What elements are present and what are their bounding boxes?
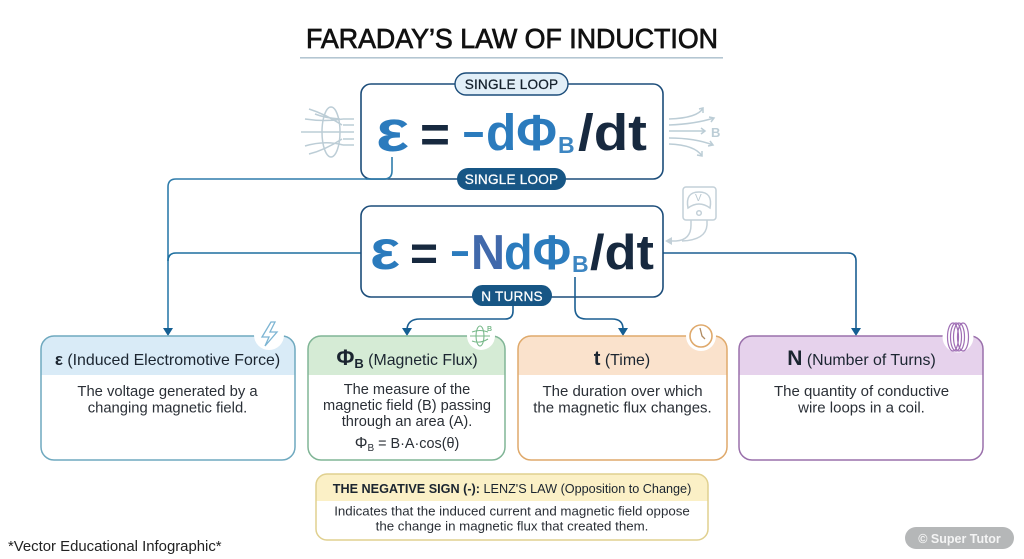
formula: single loop: dΦ bbox=[486, 104, 557, 161]
text: flux description: through an area (A). bbox=[342, 414, 472, 430]
label: single loop top: SINGLE LOOP bbox=[465, 77, 558, 92]
heading: turns: N (Number of Turns) bbox=[787, 347, 936, 370]
text: time description: The duration over which bbox=[542, 383, 703, 400]
formula: N turns: ε bbox=[370, 218, 400, 281]
formula: single loop: – bbox=[463, 102, 484, 159]
panel: magnetic flux card bbox=[308, 322, 505, 460]
icon: flux loop: B bbox=[487, 326, 492, 333]
connector: right to turns card bbox=[663, 253, 861, 336]
connector: flux to time card bbox=[575, 277, 628, 336]
text: Lenz description: Indicates that the induced current and magnetic field oppose bbox=[334, 504, 690, 518]
heading: EMF: ε (Induced Electromotive Force) bbox=[55, 350, 280, 369]
text: EMF description: changing magnetic field. bbox=[88, 400, 247, 416]
label: N turns: N TURNS bbox=[481, 289, 543, 304]
watermark: © Super Tutor bbox=[918, 532, 1001, 546]
text: turns description: The quantity of conductive bbox=[774, 383, 949, 400]
heading: Lenz: THE NEGATIVE SIGN (-): LENZ'S LAW (Opposition to Change) bbox=[333, 482, 691, 496]
formula: N turns bbox=[370, 218, 654, 281]
icon: diverging field lines B: B bbox=[711, 125, 720, 140]
caption: *Vector Educational Infographic* bbox=[8, 539, 222, 555]
text: turns description: wire loops in a coil. bbox=[797, 400, 925, 416]
watermark bbox=[905, 527, 1014, 549]
panel: single loop formula bbox=[361, 73, 663, 190]
formula: N turns: B bbox=[572, 251, 589, 277]
connector: N turns to flux card bbox=[402, 305, 513, 336]
label: single loop bottom bbox=[457, 168, 566, 190]
label: single loop bottom: SINGLE LOOP bbox=[465, 172, 558, 187]
panel: time card bbox=[518, 321, 727, 460]
heading: flux: (Magnetic Flux) bbox=[364, 352, 478, 369]
icon: clock bbox=[686, 321, 716, 351]
formula: N turns: /dt bbox=[590, 226, 654, 280]
label: N turns bbox=[472, 285, 552, 306]
panel: Lenz's law callout bbox=[316, 474, 708, 540]
formula: N turns: = bbox=[410, 227, 438, 281]
icon: voltmeter bbox=[665, 187, 716, 245]
text: flux description: magnetic field (B) passing bbox=[323, 398, 491, 414]
formula: single loop: B bbox=[558, 132, 575, 158]
formula: N turns: – bbox=[451, 224, 469, 278]
icon: diverging field lines B bbox=[669, 108, 720, 156]
icon: magnetic field through loop bbox=[301, 107, 354, 157]
icon: flux loop bbox=[467, 322, 495, 350]
formula: single loop: = bbox=[420, 106, 450, 163]
icon: lightning bolt bbox=[254, 320, 284, 350]
label: single loop top bbox=[455, 73, 568, 95]
formula: single loop: /dt bbox=[578, 104, 647, 161]
heading: time: t (Time) bbox=[594, 348, 650, 370]
formula: N turns: dΦ bbox=[504, 226, 571, 280]
text: time description: the magnetic flux changes. bbox=[533, 400, 712, 416]
panel: number of turns card bbox=[739, 322, 983, 460]
icon: coil bbox=[942, 322, 974, 352]
formula: single loop: ε bbox=[376, 99, 409, 164]
text: EMF description: The voltage generated by a bbox=[77, 384, 258, 400]
text: Lenz description: the change in magnetic flux that created them. bbox=[376, 518, 648, 534]
heading: flux: B bbox=[354, 356, 364, 371]
heading: flux: Φ bbox=[336, 345, 354, 370]
text: flux equation: = B·A·cos(θ) bbox=[374, 436, 459, 452]
icon: voltmeter: V bbox=[695, 193, 702, 204]
text: flux equation: Φ bbox=[355, 435, 367, 452]
text: flux description: The measure of the bbox=[344, 382, 470, 398]
title: FARADAY’S LAW OF INDUCTION bbox=[306, 23, 718, 54]
panel: EMF card bbox=[41, 320, 295, 460]
formula: N turns: N bbox=[471, 226, 505, 280]
text: flux equation: B bbox=[367, 443, 374, 454]
connector: epsilon to EMF card bbox=[163, 157, 392, 336]
formula: single loop bbox=[376, 99, 647, 164]
panel: N turns formula bbox=[361, 206, 663, 306]
